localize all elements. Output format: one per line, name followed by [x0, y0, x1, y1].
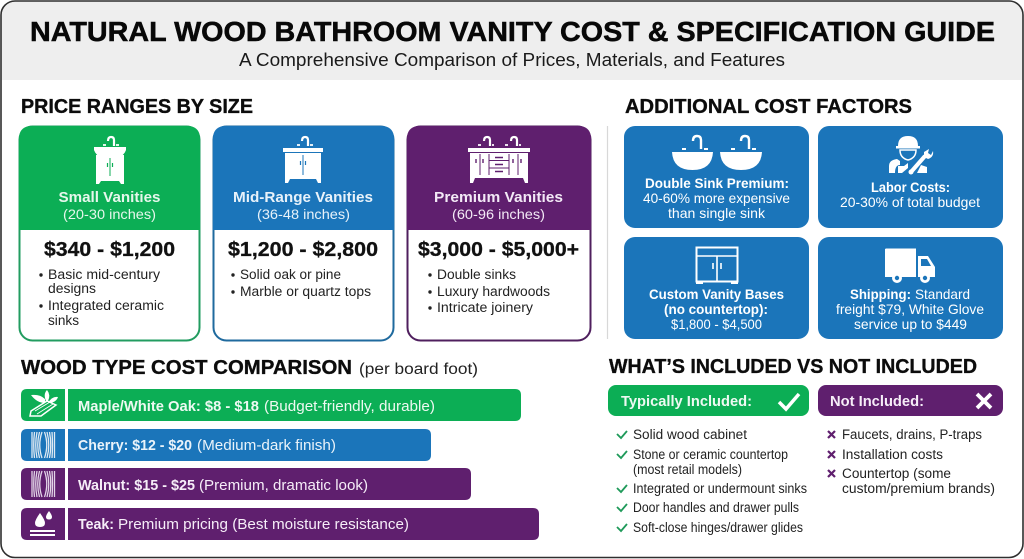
icon: worker with wrench — [889, 136, 933, 174]
bar label: cherry: (Medium-dark finish) — [197, 437, 336, 454]
icon: cherry wood grain — [32, 432, 54, 458]
size range: premium: (60-96 inches) — [452, 206, 545, 222]
icon: water drops on board — [30, 511, 55, 536]
bar label: walnut — [78, 477, 368, 494]
feature list: premium: Double sinks — [437, 267, 516, 282]
heading: what's included: WHAT’S INCLUDED VS NOT INCLUDED — [609, 356, 977, 378]
title: NATURAL WOOD BATHROOM VANITY COST & SPECIFICATION GUIDE — [30, 16, 995, 47]
panel: what's included vs not included — [608, 356, 1003, 535]
badge: not included — [818, 385, 1003, 416]
card: custom vanity bases — [624, 237, 809, 339]
badge: not included: Not Included: — [830, 393, 924, 410]
feature list: mid: Solid oak or pine — [240, 267, 341, 282]
card: labor costs — [818, 126, 1003, 228]
panel: price ranges by size — [19, 96, 591, 340]
feature list: small: Basic mid-century — [48, 267, 160, 282]
text: shipping: freight $79, White Glove — [836, 301, 984, 317]
list: excluded items: Installation costs — [842, 447, 943, 462]
icon: leaves on board — [30, 390, 58, 416]
bar: teak — [21, 508, 539, 540]
checklist: included items — [617, 427, 807, 535]
text: double sink premium: Double Sink Premium: — [645, 175, 789, 191]
bar: maple / white oak — [21, 389, 521, 421]
list: excluded items: Countertop (some — [842, 466, 951, 481]
icon: mid-range vanity — [283, 137, 323, 183]
card: small vanities — [19, 126, 200, 340]
feature list: mid: Marble or quartz tops — [240, 284, 371, 299]
feature list: small: designs — [48, 281, 96, 296]
bar label: walnut: Walnut: $15 - $25 — [78, 477, 195, 494]
card: premium vanities — [407, 126, 591, 340]
icon: cabinet outline — [696, 248, 738, 284]
heading: wood type cost comparison: (per board foot) — [359, 361, 478, 378]
text: shipping: Shipping: — [850, 286, 911, 302]
heading: wood type cost comparison: WOOD TYPE COST COMPARISON — [21, 357, 352, 379]
text: labor costs: Labor Costs: — [871, 179, 950, 195]
checklist: included items: Door handles and drawer pulls — [633, 500, 799, 515]
bar label: teak: Teak: — [78, 516, 114, 533]
list: excluded items — [828, 427, 995, 496]
bar: walnut — [21, 468, 471, 500]
subtitle: A Comprehensive Comparison of Prices, Materials, and Features — [239, 50, 785, 70]
card: shipping — [818, 237, 1003, 339]
column: typically included — [608, 385, 809, 535]
price: premium: $3,000 - $5,000+ — [418, 239, 579, 261]
text: shipping: service up to $449 — [854, 316, 967, 332]
price: mid: $1,200 - $2,800 — [228, 239, 378, 261]
card heading: mid-range: Mid-Range Vanities — [233, 190, 373, 206]
size range: mid: (36-48 inches) — [257, 206, 350, 222]
heading: price ranges: PRICE RANGES BY SIZE — [21, 96, 253, 118]
text: double sink premium: than single sink — [668, 205, 766, 221]
checklist: included items: Soft-close hinges/drawer glides — [633, 520, 803, 535]
card heading: premium: Premium Vanities — [434, 190, 563, 206]
icon: double sinks — [672, 136, 762, 170]
text: custom vanity bases: $1,800 - $4,500 — [671, 316, 762, 332]
bar label: maple / white oak — [78, 398, 435, 415]
price: small: $340 - $1,200 — [44, 239, 175, 261]
list: excluded items: Faucets, drains, P-traps — [842, 427, 982, 442]
feature list: small: sinks — [48, 313, 79, 328]
bar label: maple / white oak: Maple/White Oak: $8 - $18 — [78, 398, 259, 415]
text: double sink premium: 40-60% more expensive — [643, 190, 790, 206]
feature list: small — [39, 267, 164, 328]
feature list: small: Integrated ceramic — [48, 298, 164, 313]
list: excluded items: custom/premium brands) — [842, 481, 995, 496]
text: shipping — [836, 286, 984, 332]
panel: additional cost factors — [624, 96, 1003, 339]
icon: premium double vanity — [468, 137, 530, 183]
text: labor costs: 20-30% of total budget — [840, 194, 980, 210]
size range: small: (20-30 inches) — [63, 206, 156, 222]
text: custom vanity bases: (no countertop): — [664, 301, 768, 317]
column: not included — [818, 385, 1003, 496]
badge: typically included — [608, 385, 809, 416]
icon: small vanity — [94, 137, 126, 184]
card heading: small vanities: Small Vanities — [58, 190, 160, 206]
bar label: walnut: (Premium, dramatic look) — [199, 477, 368, 494]
checklist: included items: Stone or ceramic countertop — [633, 447, 788, 462]
feature list: premium — [428, 267, 550, 315]
checklist: included items: Integrated or undermount sinks — [633, 481, 807, 496]
bar: cherry — [21, 429, 431, 461]
text: double sink premium — [643, 175, 790, 221]
bar label: cherry — [78, 437, 336, 454]
checklist: included items: Solid wood cabinet — [633, 427, 747, 442]
bar label: cherry: Cherry: $12 - $20 — [78, 437, 192, 454]
feature list: premium: Intricate joinery — [437, 300, 533, 315]
feature list: mid — [231, 267, 371, 299]
card: mid-range vanities — [213, 126, 394, 340]
text: labor costs — [840, 179, 980, 210]
bar label: maple / white oak: (Budget-friendly, durable) — [264, 398, 435, 415]
header band — [1, 1, 1023, 80]
text: shipping: Standard — [915, 286, 970, 302]
icon: walnut wood grain — [32, 471, 54, 497]
checklist: included items: (most retail models) — [633, 462, 742, 477]
badge: typically included: Typically Included: — [621, 393, 752, 410]
bar label: teak: Premium pricing (Best moisture resistance) — [118, 516, 409, 533]
card: double sink premium — [624, 126, 809, 228]
text: custom vanity bases: Custom Vanity Bases — [649, 286, 784, 302]
heading: additional cost factors: ADDITIONAL COST FACTORS — [625, 96, 912, 118]
feature list: premium: Luxury hardwoods — [437, 284, 550, 299]
panel: wood type cost comparison — [21, 357, 539, 540]
icon: delivery truck — [885, 248, 935, 283]
text: custom vanity bases — [649, 286, 784, 332]
